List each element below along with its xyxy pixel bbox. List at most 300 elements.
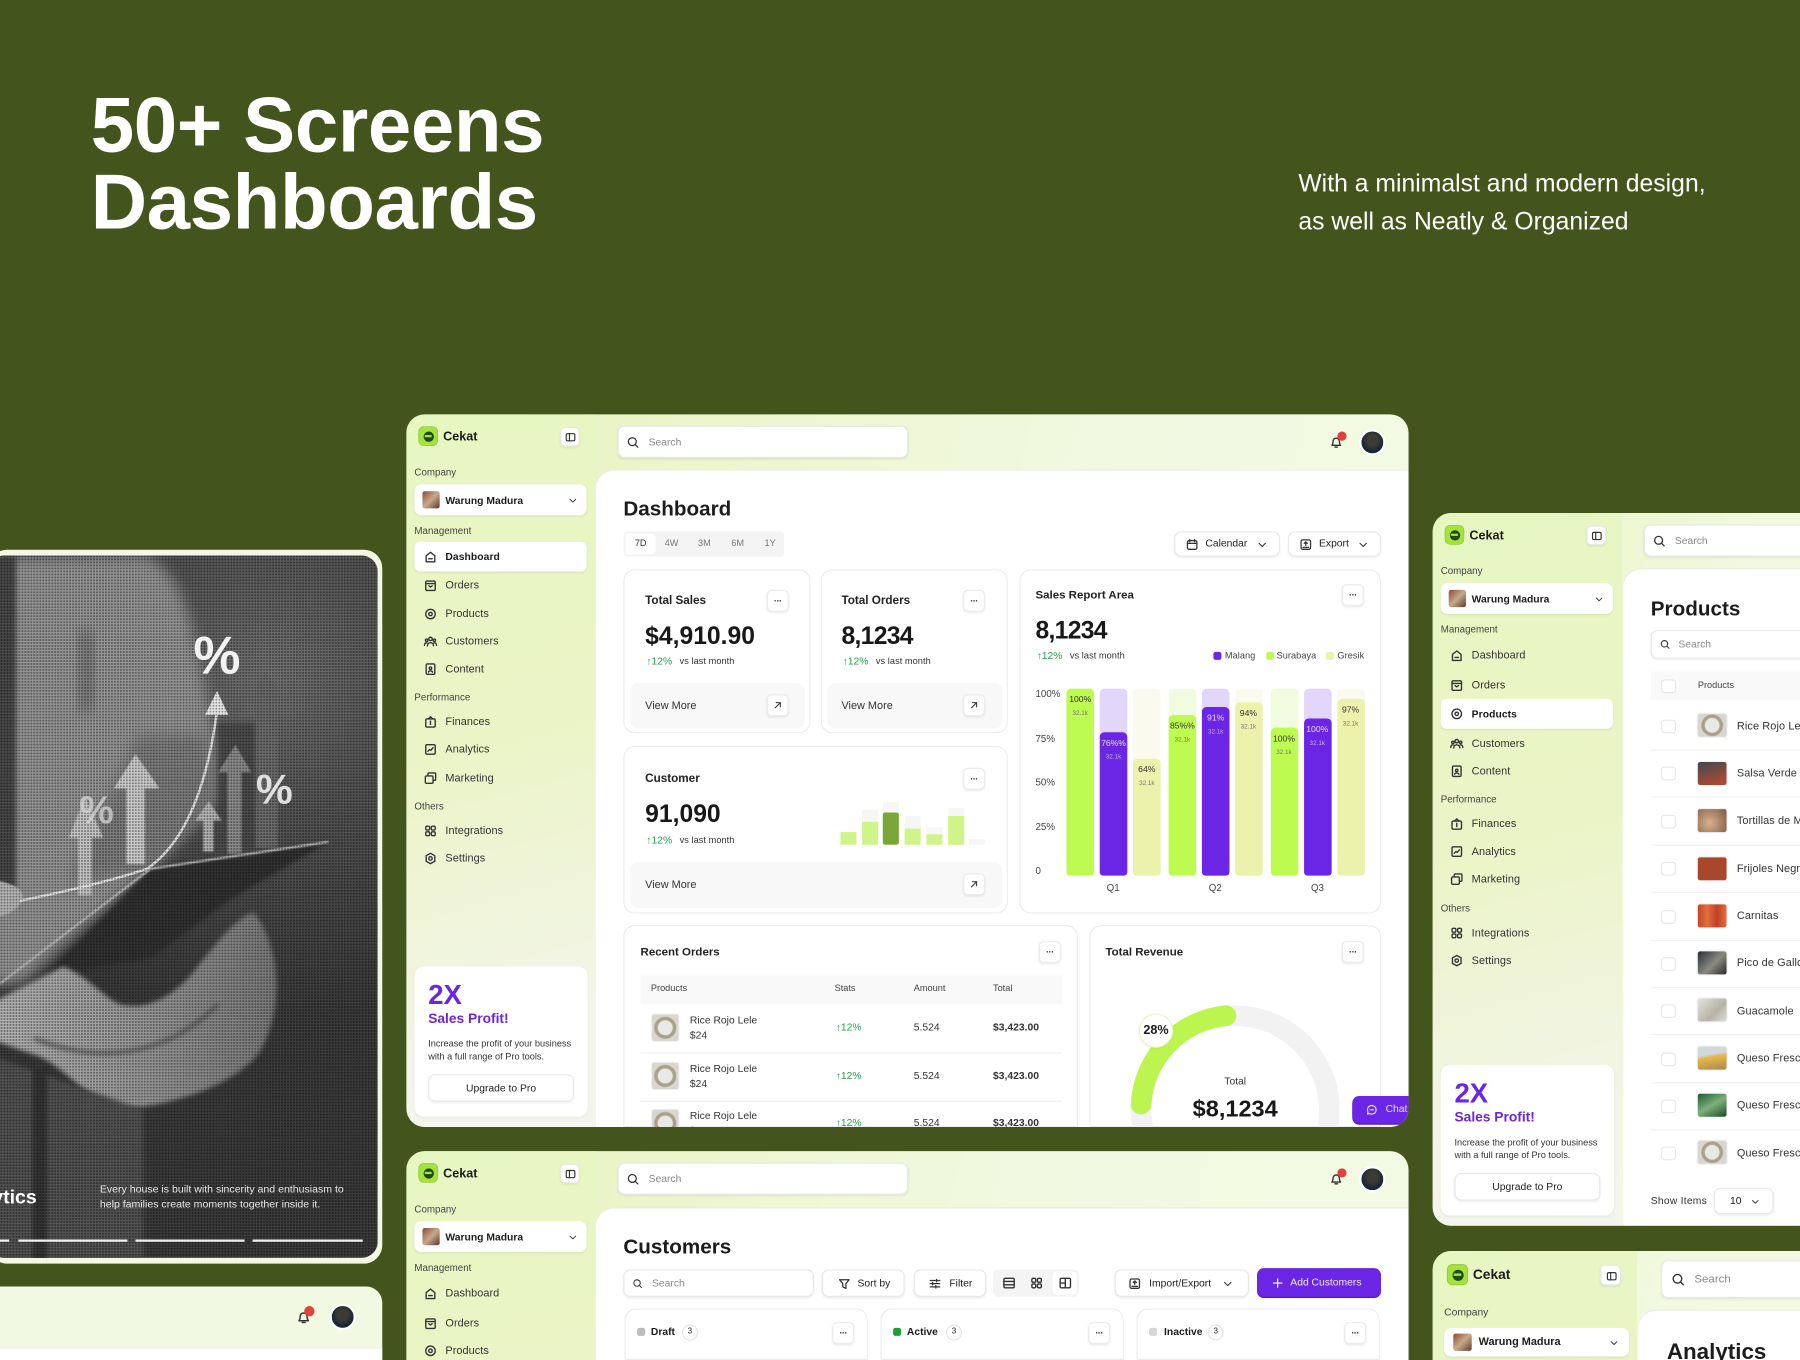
company label: Company — [414, 466, 456, 478]
total value: $8,1234 — [1193, 1096, 1278, 1122]
metric value: 91,090 — [645, 800, 721, 827]
toggle button — [1586, 526, 1606, 545]
halftone photo of tablet with growth arrows — [0, 556, 378, 1258]
company select — [414, 484, 587, 515]
nav: content: Content — [1472, 765, 1510, 778]
nav: customers: Customers — [445, 636, 499, 648]
x axis labels — [1107, 882, 1324, 893]
card footer — [630, 683, 805, 729]
bar: q1 surabaya — [1066, 689, 1094, 876]
table row: ↑12% — [836, 1069, 862, 1081]
more button: ... — [970, 771, 978, 782]
export button: Export — [1319, 537, 1349, 549]
card: sales report area — [1019, 569, 1381, 914]
more button: ... — [1349, 588, 1357, 598]
company select — [1441, 583, 1613, 614]
bar track — [1235, 689, 1262, 876]
bar: q2 malang — [1202, 707, 1229, 876]
others label: Others — [1441, 902, 1470, 914]
table search — [1651, 630, 1800, 659]
more button — [1342, 941, 1364, 963]
management label: Management — [414, 525, 471, 536]
content area — [1638, 1311, 1800, 1360]
column: inactive: 3 — [1213, 1328, 1218, 1336]
company select: Warung Madura — [445, 494, 523, 506]
bar: q3 malang: 32.1k — [1310, 740, 1325, 747]
nav: dashboard: Dashboard — [1472, 649, 1526, 662]
nav: marketing: Marketing — [445, 772, 494, 785]
nav: finances — [425, 716, 490, 729]
sidebar — [1433, 513, 1622, 1226]
add customers button — [1257, 1268, 1381, 1297]
date range tabs: 4W — [665, 538, 678, 548]
bar: q3 surabaya: 100% — [1273, 733, 1295, 744]
column: draft: ... — [839, 1326, 847, 1336]
y axis labels — [1035, 688, 1060, 876]
product name and price — [690, 1062, 757, 1089]
promo card — [414, 966, 588, 1117]
promo description — [1454, 1136, 1597, 1161]
sidebar — [406, 1151, 596, 1360]
subtitle — [1298, 169, 1706, 235]
date range tabs: 6M — [731, 538, 744, 548]
icon: bell — [298, 1312, 310, 1324]
promo description: with a full range of Pro tools. — [1454, 1150, 1570, 1160]
title: 50+ Screens — [91, 81, 544, 168]
table row — [641, 1054, 1062, 1101]
bar: q1 gresik: 64% — [1138, 764, 1155, 775]
search bar — [1661, 1260, 1800, 1298]
bar: q3 gresik: 97% — [1342, 705, 1359, 715]
nav: orders — [425, 1317, 479, 1330]
bar: q2 surabaya: 85%% — [1170, 721, 1195, 731]
view switcher — [993, 1269, 1079, 1297]
company label: Company — [414, 1203, 456, 1215]
percent sign left: % — [79, 789, 114, 832]
table header — [641, 976, 1062, 1004]
card footer: View More — [645, 879, 696, 891]
nav: orders — [1451, 679, 1505, 692]
bar track — [1270, 689, 1298, 876]
upgrade button: Upgrade to Pro — [466, 1082, 536, 1094]
card: total revenue — [1089, 925, 1381, 1127]
others label: Others — [414, 800, 444, 812]
product thumbnail — [652, 1110, 678, 1136]
product thumbnail — [652, 1062, 678, 1089]
company select: Warung Madura — [445, 1231, 523, 1242]
card footer: View More — [841, 700, 893, 712]
x axis labels: Q2 — [1209, 882, 1222, 893]
card title: Total Revenue — [1105, 946, 1183, 959]
column: active — [880, 1308, 1124, 1360]
import export button: Import/Export — [1149, 1277, 1211, 1288]
bar: q2 malang: 91% — [1207, 713, 1224, 723]
nav: orders: Orders — [445, 579, 479, 592]
brand name: Cekat — [443, 1167, 478, 1181]
card: total sales — [623, 569, 810, 733]
bar: q1 gresik: 32.1k — [1139, 780, 1155, 787]
change: ↑12% — [1037, 649, 1062, 661]
card title: Total Sales — [645, 595, 706, 608]
table row: ↑12% — [836, 1021, 862, 1033]
product name and price — [690, 1110, 757, 1127]
nav: marketing — [424, 772, 494, 785]
bar track — [1202, 689, 1229, 876]
y axis labels: 25% — [1035, 820, 1055, 832]
management label: Management — [414, 1262, 471, 1273]
bar: q2 malang: 32.1k — [1208, 729, 1223, 736]
donut gauge — [1130, 1005, 1340, 1126]
promo subheading: Sales Profit! — [428, 1010, 509, 1026]
y axis labels: 100% — [1035, 688, 1060, 699]
row: frijoles — [1651, 846, 1800, 893]
search bar — [1644, 524, 1800, 557]
column: inactive: Inactive — [1164, 1326, 1203, 1337]
search bar: Search — [649, 436, 681, 447]
table row: 5.524 — [914, 1021, 940, 1033]
bar track — [1169, 689, 1196, 876]
x axis labels: Q1 — [1107, 882, 1120, 893]
panel: main dashboard window — [406, 414, 1409, 1127]
subtitle: as well as Neatly & Organized — [1298, 207, 1629, 235]
bar track — [1100, 689, 1127, 876]
nav: dashboard: Dashboard — [445, 551, 500, 562]
toggle button — [560, 427, 580, 446]
column: inactive: ... — [1351, 1326, 1359, 1336]
logo — [419, 427, 437, 445]
percent bubble: 28% — [1143, 1024, 1169, 1037]
legend — [1213, 650, 1364, 661]
row: salsa verde — [1651, 751, 1800, 798]
logo — [1445, 526, 1464, 544]
card: recent orders — [623, 925, 1078, 1127]
legend: Surabaya — [1277, 650, 1316, 661]
performance label: Performance — [1441, 793, 1497, 805]
title — [91, 81, 544, 245]
card title: Sales Report Area — [1035, 589, 1134, 602]
content area — [596, 1209, 1409, 1360]
company select: Warung Madura — [1472, 593, 1549, 604]
table header — [1651, 671, 1800, 700]
company label: Company — [1441, 565, 1482, 577]
more button — [767, 590, 789, 612]
table row — [641, 1007, 1062, 1054]
nav: products: Products — [445, 608, 489, 621]
bar: q2 gresik: 32.1k — [1241, 724, 1256, 731]
show items label: Show Items — [1651, 1194, 1707, 1206]
bar: q1 surabaya: 100% — [1069, 694, 1091, 705]
panel: bottom-left window header — [0, 1287, 382, 1360]
more button — [1342, 584, 1364, 606]
table header: Products — [651, 983, 687, 993]
nav: products: Products — [1472, 708, 1517, 720]
calendar button — [1174, 531, 1280, 557]
bar: q3 surabaya: 32.1k — [1276, 749, 1292, 756]
date range tabs: 3M — [698, 538, 711, 548]
calendar button: Calendar — [1205, 537, 1247, 549]
panel: products window — [1433, 513, 1800, 1226]
more button: ... — [774, 593, 782, 604]
nav: products — [1441, 699, 1613, 729]
column: active: ... — [1095, 1326, 1103, 1336]
chat button: Chat — [1386, 1103, 1407, 1114]
column: draft: 3 — [688, 1328, 692, 1336]
bar: q3 surabaya — [1270, 728, 1298, 876]
nav: marketing — [1450, 873, 1520, 886]
export button — [1288, 531, 1381, 557]
photo caption description: help families create moments together inside it. — [100, 1198, 320, 1210]
column: draft — [624, 1308, 868, 1360]
notification badge — [304, 1306, 315, 1316]
content area — [596, 471, 1409, 1127]
change: ↑12% — [843, 655, 868, 666]
notification badge — [1337, 1168, 1347, 1178]
column: draft: Draft — [651, 1326, 675, 1337]
page heading: Customers — [623, 1234, 731, 1257]
percent sign right: % — [256, 766, 293, 812]
bar track — [1133, 689, 1161, 876]
bar: q1 malang: 32.1k — [1106, 754, 1121, 761]
nav: finances: Finances — [445, 716, 490, 729]
card title: Total Orders — [841, 595, 910, 608]
nav: orders: Orders — [1472, 679, 1505, 692]
search bar — [618, 426, 908, 458]
add customers button: Add Customers — [1290, 1276, 1362, 1287]
company select — [414, 1221, 587, 1252]
nav: settings — [426, 852, 485, 865]
product name and price: Rice Rojo Lele — [690, 1015, 757, 1026]
nav: orders — [425, 579, 479, 592]
bar: q1 gresik — [1133, 759, 1161, 876]
metric value: $4,910.90 — [645, 622, 755, 650]
percent bubble — [1140, 1015, 1172, 1047]
promo description: with a full range of Pro tools. — [428, 1051, 544, 1062]
nav: content: Content — [445, 663, 484, 676]
table row — [651, 1108, 1039, 1127]
more button — [963, 768, 985, 790]
row: carnitas: Carnitas — [1737, 910, 1778, 922]
legend: Gresik — [1337, 650, 1364, 661]
nav: settings: Settings — [1472, 955, 1512, 967]
table row: 5.524 — [914, 1069, 940, 1081]
bar: q1 malang: 76%% — [1101, 738, 1126, 748]
promo subheading: Sales Profit! — [1454, 1109, 1535, 1125]
bar track — [1304, 689, 1331, 876]
page heading: Dashboard — [623, 496, 731, 519]
panel: analytics photo — [0, 550, 382, 1264]
column: active: Active — [907, 1326, 938, 1337]
icon: notifications — [1331, 1174, 1342, 1184]
nav: settings: Settings — [445, 852, 485, 865]
product name and price: $24 — [690, 1029, 707, 1041]
promo headline: 2X — [428, 980, 462, 1011]
more button — [963, 590, 985, 612]
management label: Management — [1441, 624, 1498, 635]
nav: orders: Orders — [445, 1317, 479, 1330]
header label: Products — [1698, 680, 1734, 690]
search bar: Search — [1675, 534, 1708, 546]
y axis labels: 75% — [1035, 732, 1055, 743]
product thumbnail — [652, 1015, 678, 1041]
title: Dashboards — [91, 158, 538, 245]
nav: customers: Customers — [1472, 738, 1525, 750]
card footer — [828, 683, 1002, 729]
card title: Customer — [645, 773, 700, 785]
nav: marketing: Marketing — [1472, 873, 1520, 886]
panel: customers window — [406, 1151, 1409, 1360]
card footer — [630, 862, 1002, 908]
table header: Stats — [835, 983, 855, 993]
nav: finances — [1451, 818, 1516, 831]
comparison: vs last month — [1070, 650, 1125, 660]
date range tabs: 7D — [635, 538, 647, 548]
promo card — [1441, 1065, 1614, 1215]
company select — [1444, 1328, 1629, 1357]
nav: finances: Finances — [1472, 818, 1516, 831]
percent sign large: % — [193, 627, 240, 686]
promo description: Increase the profit of your business — [428, 1039, 571, 1049]
avatar — [1359, 1166, 1386, 1192]
toggle button — [560, 1164, 580, 1183]
nav: analytics — [425, 743, 490, 756]
change: ↑12% — [646, 834, 672, 845]
nav: dashboard: Dashboard — [445, 1287, 499, 1300]
x axis labels: Q3 — [1311, 882, 1324, 893]
toggle button — [1600, 1265, 1621, 1285]
row: guacamole — [1651, 988, 1800, 1035]
bar: q2 surabaya: 32.1k — [1175, 737, 1190, 744]
bar: q3 gresik — [1337, 699, 1364, 876]
nav: analytics — [1451, 846, 1516, 858]
row: guacamole: Guacamole — [1737, 1005, 1794, 1017]
sidebar — [1433, 1251, 1637, 1360]
filter button — [914, 1269, 986, 1297]
page heading: Products — [1651, 596, 1740, 619]
avatar — [329, 1304, 356, 1330]
table header: Amount — [914, 983, 945, 993]
nav: integrations: Integrations — [1472, 927, 1529, 940]
logo — [419, 1164, 437, 1182]
brand name: Cekat — [443, 430, 478, 444]
bar: q1 malang — [1100, 732, 1127, 876]
y axis labels: 50% — [1035, 776, 1055, 788]
date range tabs — [623, 531, 784, 557]
photo caption description — [100, 1183, 344, 1210]
row: tortillas — [1651, 798, 1800, 846]
subtitle: With a minimalst and modern design, — [1298, 169, 1706, 197]
more button: ... — [1046, 945, 1054, 955]
toolbar search: Search — [652, 1277, 685, 1288]
nav: content — [426, 663, 484, 676]
search bar — [618, 1163, 908, 1195]
change: ↑12% — [646, 655, 672, 666]
nav: analytics: Analytics — [445, 743, 490, 756]
table row: $3,423.00 — [993, 1021, 1039, 1033]
product name and price: Rice Rojo Lele — [690, 1062, 757, 1074]
header checkbox — [1661, 679, 1676, 693]
bar: q2 surabaya — [1169, 715, 1196, 876]
row: queso fresco — [1651, 1035, 1800, 1083]
row: carnitas — [1651, 893, 1800, 941]
nav: dashboard — [414, 542, 587, 572]
nav: integrations: Integrations — [445, 825, 503, 838]
product name and price: $24 — [690, 1077, 707, 1089]
row: pico de gallo — [1651, 940, 1800, 988]
row: salsa verde: Salsa Verde — [1737, 768, 1797, 780]
nav: products: Products — [445, 1345, 489, 1357]
card: customer — [623, 746, 1008, 914]
table header: Total — [993, 983, 1012, 993]
search bar: Search — [1694, 1273, 1731, 1286]
sort button: Sort by — [858, 1277, 890, 1288]
comparison: vs last month — [680, 834, 734, 845]
product name and price: Rice Rojo Lele — [690, 1110, 757, 1121]
nav: products — [425, 1345, 489, 1357]
more button: ... — [970, 593, 978, 604]
bar: q2 gresik — [1235, 702, 1262, 876]
upgrade button: Upgrade to Pro — [1492, 1181, 1562, 1193]
show items select: 10 — [1730, 1195, 1741, 1206]
upgrade button — [428, 1074, 574, 1102]
card footer: View More — [645, 700, 696, 712]
sidebar — [406, 414, 596, 1127]
content area — [1623, 569, 1800, 1226]
bar: q3 gresik: 32.1k — [1343, 721, 1358, 728]
date range tabs: 1Y — [765, 538, 776, 548]
row: rice rojo lele — [1651, 702, 1800, 751]
brand name: Cekat — [1473, 1266, 1510, 1282]
chat button — [1352, 1096, 1409, 1124]
product name and price — [690, 1015, 757, 1041]
bar track — [1337, 689, 1364, 876]
y axis labels: 0 — [1035, 865, 1041, 876]
company label: Company — [1444, 1306, 1488, 1318]
import export button — [1115, 1269, 1249, 1297]
more button — [1039, 941, 1061, 963]
icon: notifications — [1331, 438, 1342, 448]
legend: Malang — [1225, 650, 1255, 661]
nav: settings — [1452, 954, 1512, 967]
search bar: Search — [649, 1172, 681, 1184]
row: queso fresco rice — [1651, 1130, 1800, 1176]
avatar — [1359, 429, 1386, 456]
nav: content — [1452, 765, 1510, 778]
row: queso fresco green — [1651, 1082, 1800, 1130]
photo caption description: Every house is built with sincerity and enthusiasm to — [100, 1183, 344, 1195]
sort button — [822, 1269, 905, 1297]
nav: analytics: Analytics — [1472, 846, 1516, 858]
bar: q2 gresik: 94% — [1240, 708, 1257, 718]
bar: q3 malang — [1304, 718, 1331, 876]
table search: Search — [1678, 638, 1711, 650]
carousel progress lines — [0, 1240, 363, 1242]
brand name: Cekat — [1469, 529, 1504, 543]
card title: Recent Orders — [641, 946, 720, 959]
metric value: 8,1234 — [841, 622, 913, 650]
comparison: vs last month — [876, 655, 931, 666]
nav: products — [425, 608, 489, 621]
performance label: Performance — [414, 691, 470, 703]
panel: analytics window — [1433, 1251, 1800, 1360]
toolbar search — [623, 1269, 814, 1297]
show items select — [1714, 1188, 1774, 1214]
stacked bar chart — [1066, 688, 1365, 876]
promo headline: 2X — [1454, 1079, 1488, 1110]
column: active: 3 — [952, 1328, 956, 1336]
card: total orders — [821, 569, 1008, 733]
promo description: Increase the profit of your business — [1454, 1137, 1597, 1148]
bar: q1 surabaya: 32.1k — [1072, 710, 1088, 717]
